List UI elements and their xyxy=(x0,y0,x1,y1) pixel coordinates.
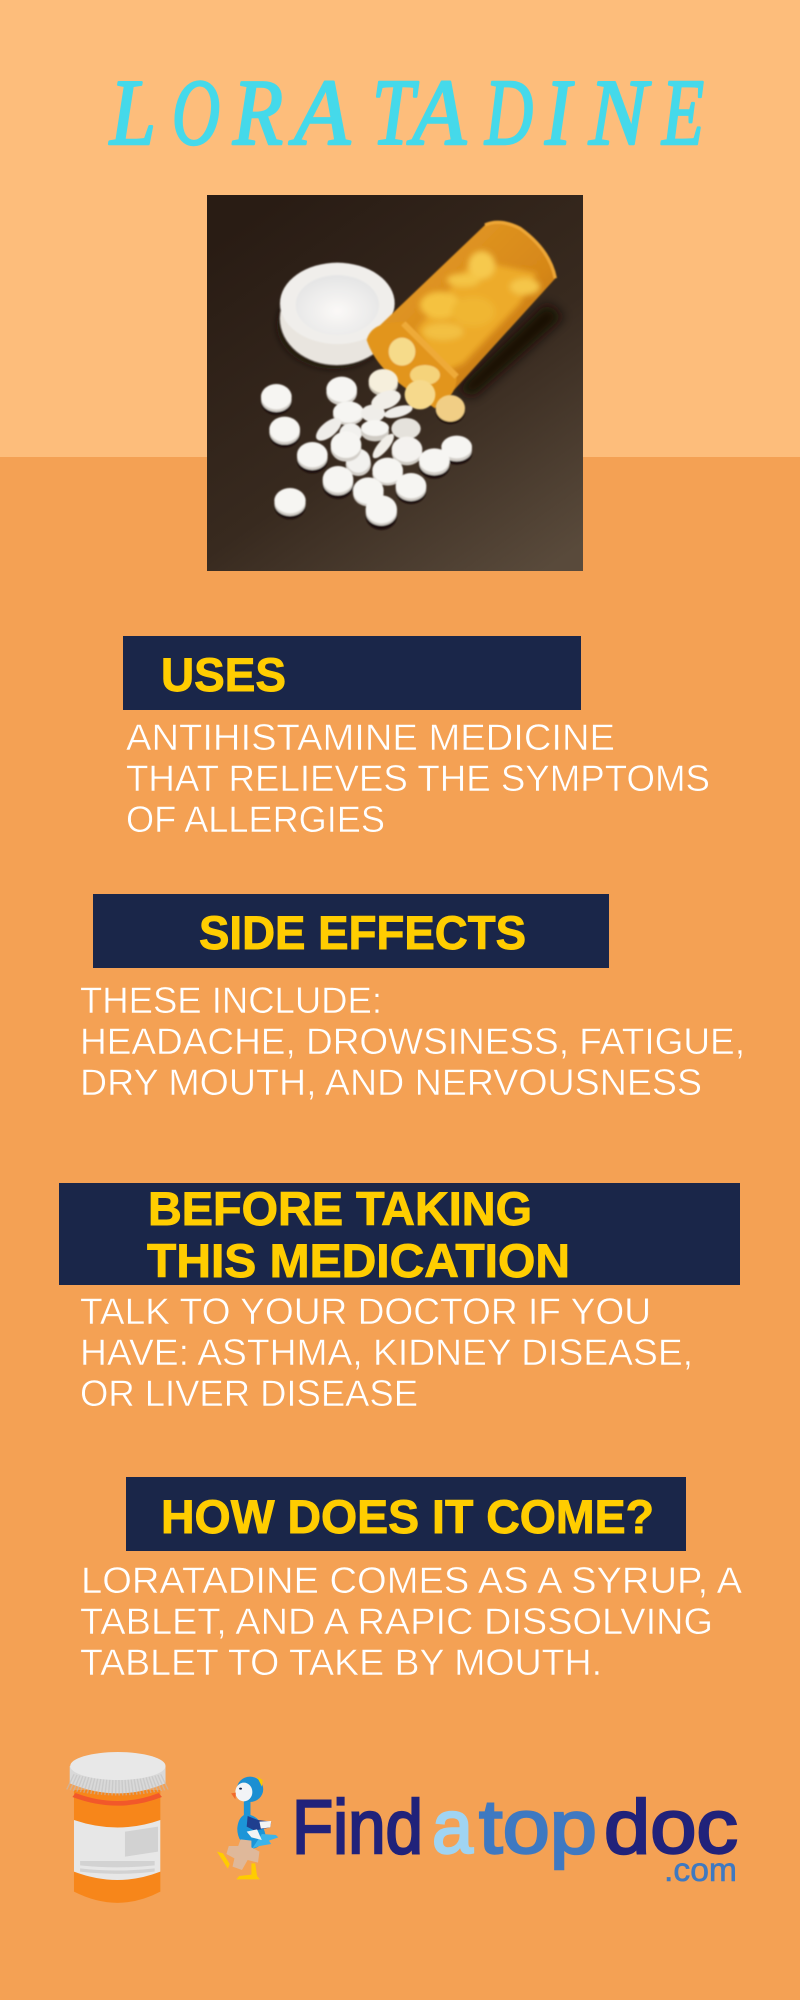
icon: pill bottle xyxy=(70,1752,166,1903)
section: before taking this medication xyxy=(59,1182,740,1414)
heading bar: uses: USES xyxy=(161,648,286,701)
text: uses: OF ALLERGIES xyxy=(126,799,385,840)
text: how does it come xyxy=(80,1560,742,1683)
heading bar: side effects: SIDE EFFECTS xyxy=(199,906,526,959)
text: side effects: DRY MOUTH, AND NERVOUSNESS xyxy=(80,1062,702,1103)
logo: findatopdoc mascot xyxy=(217,1777,278,1879)
title: L xyxy=(108,61,156,165)
heading bar: side effects xyxy=(93,894,609,968)
title: A xyxy=(406,61,467,165)
title: I xyxy=(544,61,574,165)
title: R xyxy=(232,61,283,165)
title: N xyxy=(588,61,652,165)
text: before taking: HAVE: ASTHMA, KIDNEY DISEASE, xyxy=(80,1332,693,1373)
heading bar: before taking this medication: BEFORE TAKING xyxy=(148,1182,532,1235)
logo: findatopdoc wordmark: top xyxy=(479,1785,597,1870)
heading bar: before taking this medication xyxy=(59,1182,740,1287)
logo: findatopdoc wordmark: Find xyxy=(292,1785,423,1870)
background: orange lower area xyxy=(0,457,800,2000)
title: T xyxy=(372,61,419,165)
title: A xyxy=(288,61,351,165)
text: uses xyxy=(126,717,710,840)
heading bar: before taking this medication: THIS MEDICATION xyxy=(147,1234,570,1287)
logo: findatopdoc wordmark: .com xyxy=(664,1851,737,1888)
text: side effects: THESE INCLUDE: xyxy=(80,980,382,1021)
background: light top band xyxy=(0,0,800,457)
photo: spilled pill bottle xyxy=(207,195,583,571)
text: how does it come: TABLET TO TAKE BY MOUTH. xyxy=(80,1642,602,1683)
heading bar: how does it come xyxy=(126,1477,686,1551)
text: how does it come: LORATADINE COMES AS A SYRUP, A xyxy=(81,1560,742,1601)
text: before taking: OR LIVER DISEASE xyxy=(80,1373,418,1414)
section: how does it come xyxy=(80,1477,742,1683)
section: uses xyxy=(123,636,710,840)
text: uses: THAT RELIEVES THE SYMPTOMS xyxy=(126,758,710,799)
title xyxy=(108,61,704,165)
text: before taking: TALK TO YOUR DOCTOR IF YOU xyxy=(80,1291,651,1332)
logo: findatopdoc wordmark xyxy=(292,1785,738,1888)
heading bar: uses xyxy=(123,636,581,710)
logo: findatopdoc wordmark: doc xyxy=(604,1785,738,1870)
bottle shadow xyxy=(457,303,563,397)
tablets xyxy=(261,369,472,530)
text: side effects xyxy=(80,980,745,1103)
logo: findatopdoc wordmark: a xyxy=(432,1785,474,1870)
text: before taking xyxy=(80,1291,693,1414)
text: side effects: HEADACHE, DROWSINESS, FATIGUE, xyxy=(80,1021,745,1062)
text: uses: ANTIHISTAMINE MEDICINE xyxy=(126,717,615,758)
white cap xyxy=(276,263,395,370)
text: how does it come: TABLET, AND A RAPIC DISSOLVING xyxy=(80,1601,713,1642)
amber bottle xyxy=(367,222,555,408)
title: E xyxy=(661,61,704,165)
title: O xyxy=(172,61,220,165)
section: side effects xyxy=(80,894,745,1103)
title: D xyxy=(484,61,533,165)
heading bar: how does it come: HOW DOES IT COME? xyxy=(161,1490,654,1543)
